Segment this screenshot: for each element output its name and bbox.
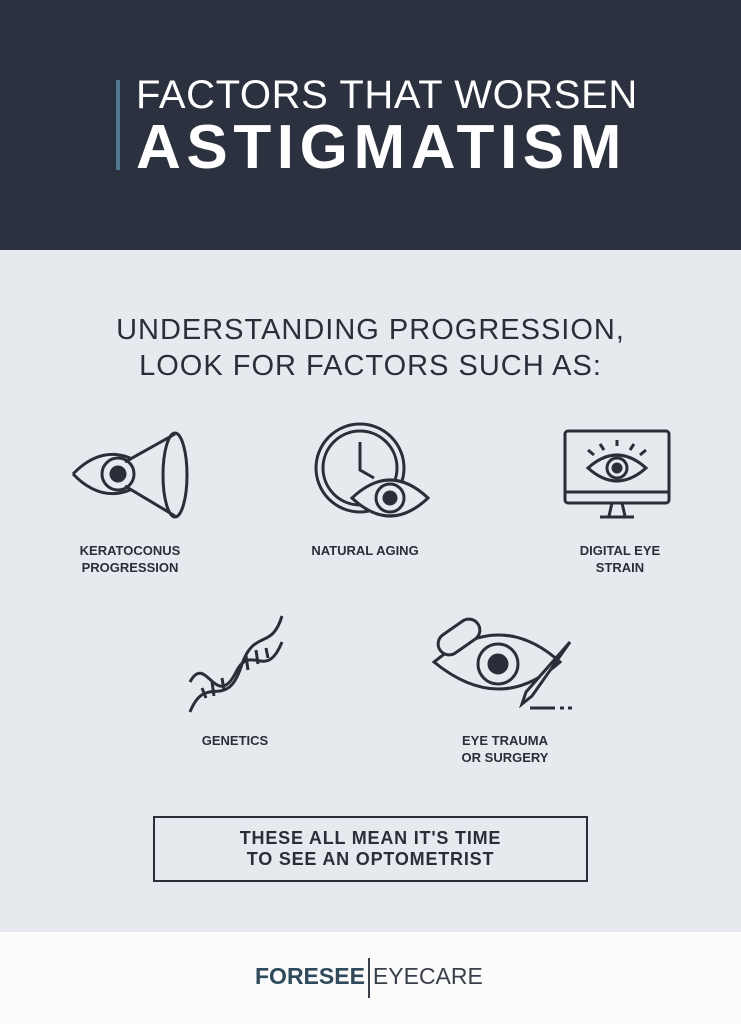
label: keratoconus: KERATOCONUS [80, 543, 180, 558]
subtitle [116, 314, 625, 382]
title: FACTORS THAT WORSEN [136, 73, 638, 117]
label: eye trauma [462, 733, 548, 765]
icon: eye trauma [432, 618, 572, 710]
icon: keratoconus [72, 432, 188, 518]
icon: genetics [188, 616, 284, 712]
header panel [0, 0, 741, 250]
label: keratoconus: PROGRESSION [82, 560, 178, 575]
icon: digital eye strain [564, 430, 670, 518]
label: eye trauma: EYE TRAUMA [462, 733, 548, 748]
footer [0, 932, 741, 1024]
callout box: THESE ALL MEAN IT'S TIME [240, 828, 501, 848]
subtitle: LOOK FOR FACTORS SUCH AS: [139, 350, 602, 382]
title: ASTIGMATISM [136, 113, 627, 182]
label: digital eye strain: DIGITAL EYE [580, 543, 660, 558]
label: eye trauma: OR SURGERY [462, 750, 548, 765]
icon: natural aging [314, 422, 430, 518]
label: digital eye strain: STRAIN [596, 560, 644, 575]
callout box: TO SEE AN OPTOMETRIST [247, 849, 494, 869]
label: genetics: GENETICS [202, 733, 268, 748]
callout box [153, 816, 588, 882]
title [136, 73, 638, 182]
label: keratoconus [80, 543, 180, 575]
label: natural aging: NATURAL AGING [311, 543, 419, 558]
label: digital eye strain [580, 543, 660, 575]
subtitle: UNDERSTANDING PROGRESSION, [116, 314, 625, 346]
logo: FORESEE EYECARE [255, 963, 483, 989]
accent bar [116, 80, 120, 170]
